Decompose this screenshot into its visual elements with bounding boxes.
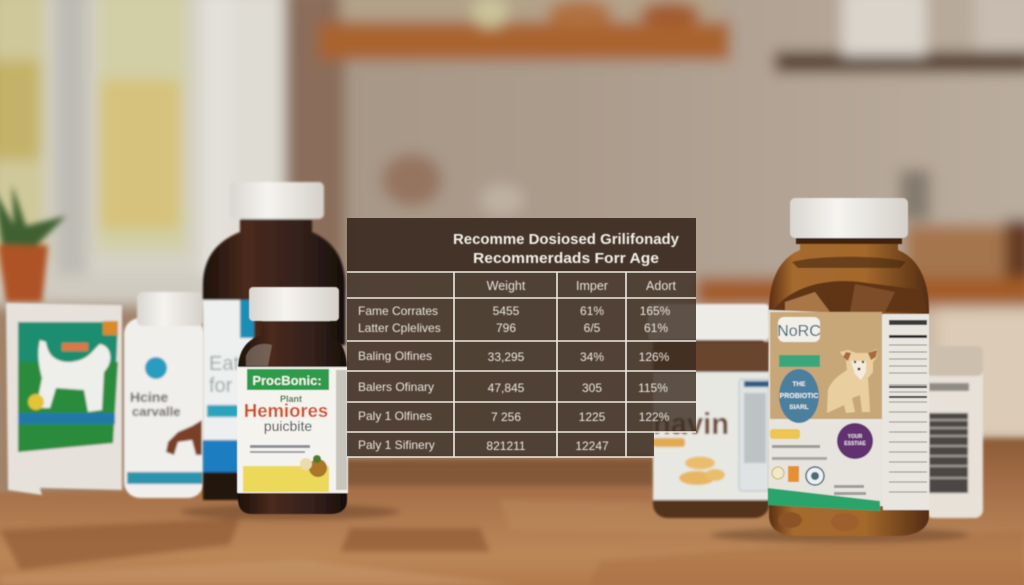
white probiotic bottle <box>124 292 204 498</box>
row labels: Balers Ofinary <box>358 380 434 394</box>
table grid lines <box>347 272 696 457</box>
column headers <box>487 279 676 293</box>
glass reflection <box>246 344 272 366</box>
right counter <box>696 278 1024 306</box>
large amber bottle with NoRC label: PROBIOTIC <box>780 393 818 400</box>
adort values: 122% <box>639 410 670 424</box>
yellow panel <box>243 466 329 492</box>
tan panel <box>770 312 882 419</box>
adort values: 61% <box>644 321 668 335</box>
large amber bottle with NoRC label: YOUR <box>848 434 863 440</box>
logo plate <box>778 317 820 342</box>
amber probiotic bottle front left <box>237 287 348 514</box>
weight values <box>486 304 526 453</box>
small icons <box>772 467 784 479</box>
row labels: Latter Cplelives <box>358 321 441 335</box>
imper values: 305 <box>582 381 602 395</box>
label <box>237 367 348 493</box>
cap <box>249 287 339 321</box>
left sill <box>0 276 290 306</box>
label base <box>768 310 929 510</box>
pillar <box>285 0 345 290</box>
potted plant <box>0 185 66 302</box>
glass body <box>769 238 929 536</box>
large amber bottle with NoRC label <box>768 198 929 536</box>
green band <box>768 488 880 511</box>
tall dark bottle <box>203 182 345 500</box>
round badge <box>145 357 167 379</box>
adort values: 165% <box>640 304 671 318</box>
purple seal <box>837 423 873 459</box>
amber probiotic bottle front left: puicbite <box>264 418 312 434</box>
weight values: 33,295 <box>488 350 525 364</box>
capsules in neck <box>772 281 927 312</box>
weight values: 796 <box>496 321 516 335</box>
large amber bottle with NoRC label: SIARL <box>789 404 809 411</box>
wooden table surface <box>0 438 1024 585</box>
mid wall objects <box>382 154 442 206</box>
table title: Recommerdads Forr Age <box>473 251 659 267</box>
blue circle badge <box>779 369 819 423</box>
capsule jar behind table <box>648 304 769 518</box>
column headers: Weight <box>487 279 526 293</box>
weight values: 7 256 <box>491 410 521 424</box>
table title: Recomme Dosiosed Grilifonady <box>453 232 679 248</box>
supplement pouch with dog <box>6 303 122 495</box>
imper values: 6/5 <box>584 321 601 335</box>
large amber bottle with NoRC label: THE <box>792 381 806 388</box>
adort values: 126% <box>639 350 670 364</box>
neck band <box>796 238 902 244</box>
large amber bottle with NoRC label: NoRC <box>777 323 821 340</box>
imper values: 34% <box>580 350 604 364</box>
cap <box>230 182 324 219</box>
green tag <box>779 355 820 367</box>
amber probiotic bottle front left: Plant <box>280 394 302 404</box>
yellow tag <box>770 429 800 439</box>
dog figure <box>166 420 202 455</box>
row labels: Baling Olfines <box>358 349 432 363</box>
window frame <box>0 0 285 305</box>
dog silhouette <box>36 340 110 412</box>
puppy <box>827 349 877 413</box>
weight values: 5455 <box>493 304 520 318</box>
large amber bottle with NoRC label: ESSTIAE <box>844 441 866 447</box>
amber probiotic bottle front left: ProcBonic: <box>252 373 322 388</box>
white probiotic bottle: Hcine <box>130 389 168 405</box>
imper values: 1225 <box>579 410 606 424</box>
row labels: Fame Corrates <box>358 304 438 318</box>
imper values <box>575 304 609 453</box>
adort values: 115% <box>638 381 668 395</box>
tall dark bottle: Eatt <box>209 353 245 375</box>
barcode <box>929 413 968 493</box>
table background <box>347 218 696 457</box>
row labels: Paly 1 Sifinery <box>358 438 435 452</box>
row labels <box>358 304 441 452</box>
table title <box>453 232 679 267</box>
tall dark bottle: for <box>209 375 233 397</box>
imper values: 12247 <box>575 439 609 453</box>
right shelf <box>775 52 1024 72</box>
cap <box>790 198 908 238</box>
nutrition panel <box>883 314 929 510</box>
side panel <box>336 370 347 490</box>
upper shelf <box>318 22 730 60</box>
adort values <box>638 304 671 424</box>
imper values: 61% <box>580 304 604 318</box>
cap <box>137 292 203 326</box>
capsule jar behind table: havin <box>653 406 729 441</box>
white probiotic bottle: carvalle <box>132 404 180 419</box>
weight values: 821211 <box>486 439 526 453</box>
header band <box>347 218 696 271</box>
bottom capsules <box>831 513 859 531</box>
weight values: 47,845 <box>488 381 525 395</box>
row labels: Paly 1 Olfines <box>358 409 432 423</box>
column headers: Adort <box>646 279 676 293</box>
column headers: Imper <box>576 279 608 293</box>
small white bottle back right <box>925 346 983 518</box>
window panes <box>0 0 45 270</box>
pouch label <box>18 322 118 452</box>
amber probiotic bottle front left: Hemiores <box>244 400 328 421</box>
dosage table panel <box>347 218 696 457</box>
plant leaves <box>0 185 66 246</box>
